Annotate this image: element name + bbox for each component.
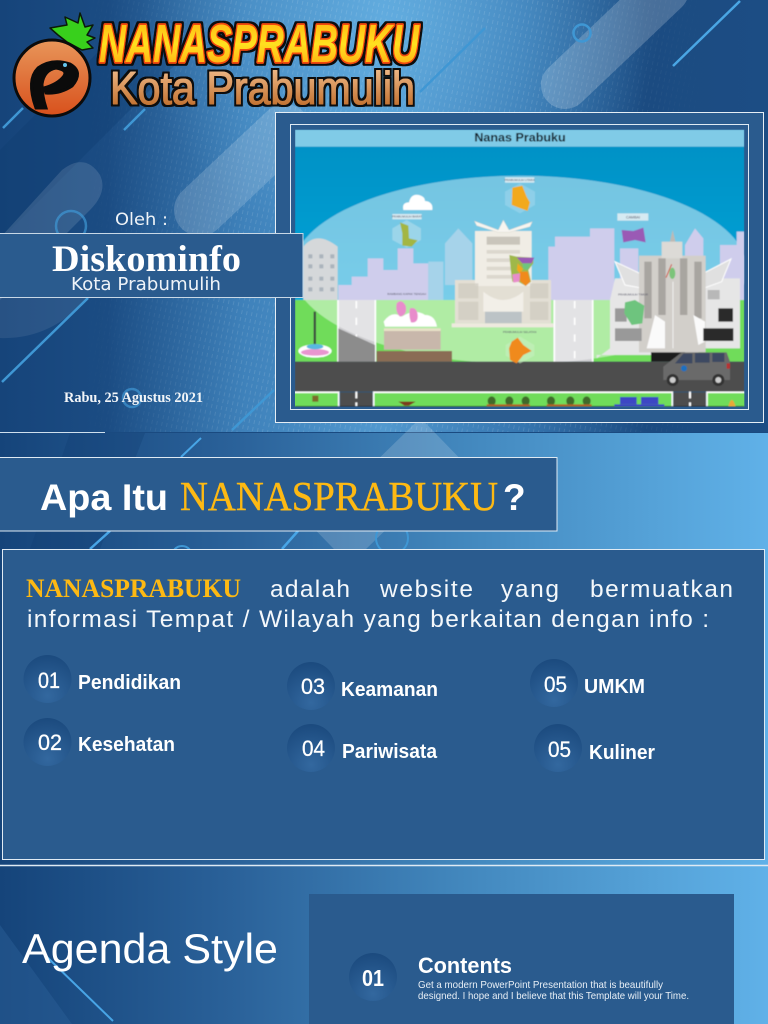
item 05 Kuliner bbox=[534, 724, 655, 772]
wordmark NANASPRABUKU: NANASPRABUKU bbox=[99, 14, 420, 74]
map pin: Prabumulih Timur bbox=[618, 292, 649, 325]
background: cover slide bbox=[0, 0, 768, 432]
map pin: Cambai: CAMBAI bbox=[626, 215, 640, 219]
map pin: Rambang Kapak Tengah: RAMBANG KAPAK TENGAH bbox=[387, 292, 426, 296]
item 03 Keamanan: 03 bbox=[301, 674, 325, 699]
panel: agenda contents bbox=[309, 894, 734, 1024]
item 02 Kesehatan bbox=[24, 718, 175, 766]
bottom sidewalks bbox=[295, 390, 744, 407]
map pin: Cambai bbox=[617, 213, 648, 242]
map pin: Prabumulih Barat bbox=[392, 214, 422, 248]
building: left hotel bbox=[303, 238, 338, 300]
item description: Get a modern PowerPoint Presentation that is beautifully bbox=[418, 979, 664, 991]
organisation city: Kota Prabumulih bbox=[71, 275, 221, 295]
item 01 badge: 01 bbox=[362, 965, 384, 991]
item description: designed. I hope and I believe that this Template will your Time. bbox=[418, 990, 689, 1002]
map pin: Prabumulih Barat: PRABUMULIH BARAT bbox=[392, 215, 422, 219]
wordmark Kota Prabumulih: Kota Prabumulih bbox=[110, 62, 415, 114]
building: city hall bbox=[452, 220, 553, 327]
item 01 Pendidikan: 01 bbox=[38, 668, 60, 693]
panel: map screenshot bbox=[276, 112, 764, 422]
monument: horses on pedestal bbox=[377, 301, 452, 362]
text block: definition: adalah bbox=[270, 576, 350, 603]
background: definition slide bbox=[0, 432, 768, 865]
map pin: whole city bbox=[509, 255, 534, 286]
text block: definition: website bbox=[379, 576, 473, 603]
text block: definition bbox=[26, 574, 733, 633]
item 03 Keamanan: Keamanan bbox=[341, 679, 438, 701]
sky ellipse bbox=[293, 176, 747, 364]
item 01 Pendidikan bbox=[24, 655, 181, 703]
item title: Contents: Contents bbox=[418, 953, 512, 978]
background: agenda slide bbox=[0, 866, 768, 1024]
icon: pineapple leaves bbox=[50, 13, 95, 50]
title: Nanas Prabuku bbox=[295, 130, 744, 147]
map pin: Prabumulih Selatan: PRABUMULIH SELATAN bbox=[503, 330, 536, 334]
text block: definition: yang bbox=[501, 576, 559, 603]
map pin: Prabumulih Utara: PRABUMULIH UTARA bbox=[505, 178, 535, 182]
icon: orange fruit with letter e bbox=[14, 40, 90, 116]
text block: definition: bermuatkan bbox=[590, 576, 733, 603]
item 03 Keamanan bbox=[287, 662, 438, 710]
heading panel: Apa Itu Nanasprabuku: NANASPRABUKU bbox=[180, 473, 498, 519]
item description bbox=[418, 979, 689, 1002]
item 04 Pariwisata: 04 bbox=[302, 736, 325, 761]
heading panel: Apa Itu Nanasprabuku: Apa Itu bbox=[40, 477, 168, 518]
logo: Nanasprabuku Kota Prabumulih bbox=[14, 13, 420, 116]
item 05 UMKM: UMKM bbox=[584, 676, 645, 698]
item 04 Pariwisata bbox=[287, 724, 438, 772]
banner: Diskominfo bbox=[0, 234, 303, 298]
building: grand office right bbox=[597, 230, 740, 362]
heading: Agenda Style: Agenda Style bbox=[22, 925, 278, 972]
panel: definition and topics bbox=[2, 550, 764, 860]
illustration: city scene bbox=[292, 130, 750, 412]
heading panel: Apa Itu Nanasprabuku bbox=[0, 458, 557, 531]
map pin: Prabumulih Timur: PRABUMULIH TIMUR bbox=[618, 292, 649, 296]
text: Oleh: Oleh : bbox=[115, 210, 168, 230]
item 05 UMKM bbox=[530, 659, 645, 707]
text block: definition: NANASPRABUKU bbox=[26, 574, 241, 603]
item 05 Kuliner: Kuliner bbox=[589, 742, 655, 764]
text block: definition: informasi Tempat / Wilayah yang berkaitan dengan info : bbox=[27, 606, 709, 633]
item 01 Pendidikan: Pendidikan bbox=[78, 672, 181, 694]
text: date: Rabu, 25 Agustus 2021 bbox=[64, 390, 203, 406]
fountain statue bbox=[298, 312, 332, 358]
car: grey van bbox=[663, 352, 730, 386]
item 01 badge bbox=[349, 953, 397, 1001]
item 05 UMKM: 05 bbox=[544, 672, 567, 697]
street bbox=[295, 362, 744, 392]
cloud bbox=[403, 195, 432, 210]
title: Nanas Prabuku: Nanas Prabuku bbox=[474, 131, 566, 145]
item 05 Kuliner: 05 bbox=[548, 737, 571, 762]
map pin: Prabumulih Selatan bbox=[503, 330, 536, 363]
item 02 Kesehatan: 02 bbox=[38, 730, 62, 755]
map pin: Prabumulih Utara bbox=[505, 177, 535, 213]
organisation name: Diskominfo bbox=[52, 239, 241, 280]
item 04 Pariwisata: Pariwisata bbox=[342, 741, 438, 763]
heading panel: Apa Itu Nanasprabuku: ? bbox=[503, 477, 526, 518]
item 02 Kesehatan: Kesehatan bbox=[78, 734, 175, 756]
